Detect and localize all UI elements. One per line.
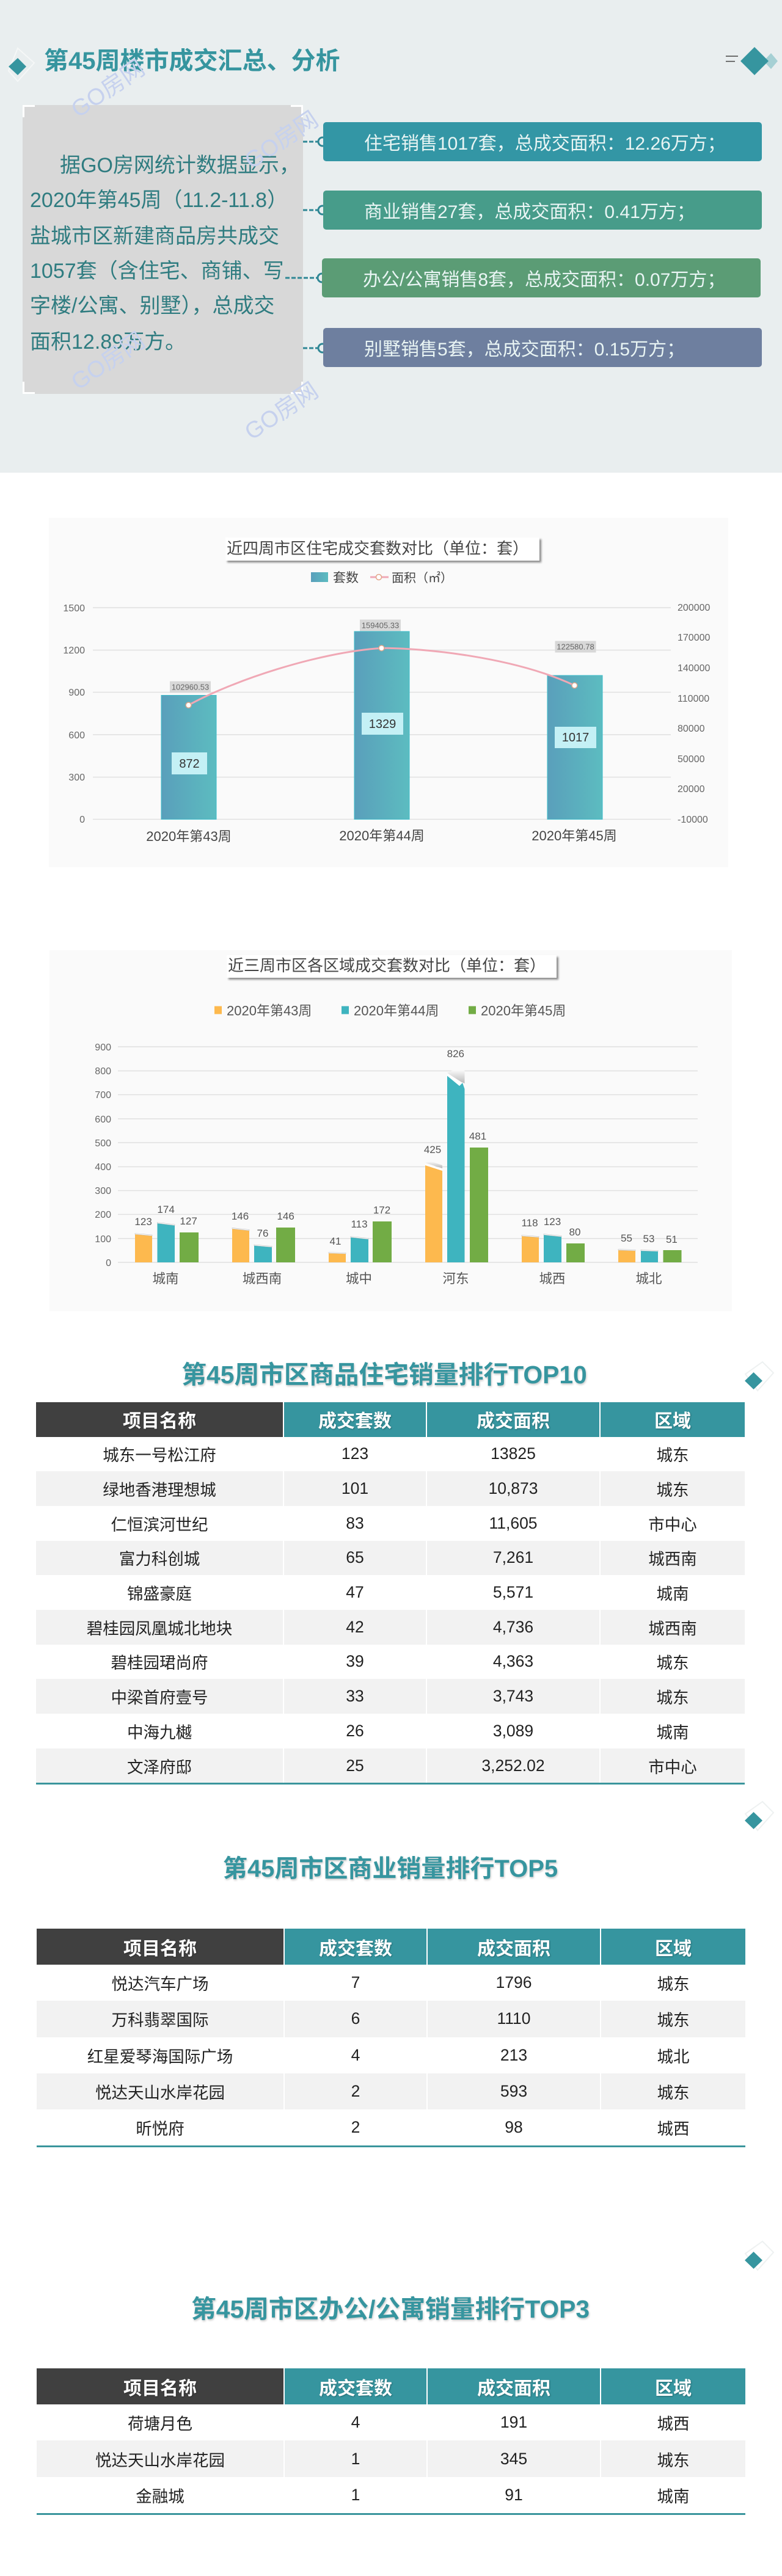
legend [214, 1003, 566, 1019]
axis labels: 400 [95, 1162, 111, 1173]
legend: 面积（㎡） [392, 570, 453, 585]
table header: 区域 [655, 2378, 692, 2399]
table: residential top 10: 25 [346, 1756, 364, 1775]
left axis labels: 600 [68, 730, 85, 741]
table: residential top 10: 城东 [656, 1481, 689, 1499]
callout: commercial sales [323, 191, 762, 230]
legend: 2020年第43周 [227, 1003, 312, 1019]
left axis labels: 1200 [63, 646, 85, 656]
table: residential top 10: 文泽府邸 [127, 1758, 192, 1777]
category labels: 河东 [442, 1272, 469, 1286]
axis labels: 800 [95, 1066, 111, 1077]
callout: residential sales [323, 122, 762, 161]
icon: commercial section diamond [744, 1801, 774, 1831]
text block: market summary paragraph: 1057套（含住宅、商铺、写 [30, 260, 284, 283]
green bars: week 45 [180, 1148, 682, 1262]
right axis labels: 110000 [678, 694, 709, 704]
value labels: 172 [373, 1204, 390, 1216]
right axis labels [678, 603, 710, 825]
table header: 项目名称 [123, 1938, 197, 1959]
callout: villa sales [323, 328, 762, 367]
value labels: 481 [469, 1130, 486, 1142]
value labels: 51 [666, 1234, 678, 1245]
left axis labels [63, 603, 85, 825]
category labels: 城西 [539, 1272, 566, 1286]
legend [311, 570, 453, 585]
chart title: three-week district comparison: 近三周市区各区域成交套数对比（单位：套） [228, 956, 546, 975]
category labels: 2020年第44周 [339, 828, 425, 843]
value labels [134, 1048, 678, 1247]
axis labels: 0 [106, 1258, 111, 1268]
table: residential top 10: 83 [346, 1514, 364, 1532]
table: residential top 10: 城东 [656, 1689, 689, 1707]
icon: left title diamond [8, 48, 35, 82]
axis labels [95, 1042, 111, 1268]
table: office top 3: 345 [500, 2450, 527, 2468]
table header: 项目名称 [123, 1411, 196, 1432]
table: residential top 10: 101 [342, 1479, 368, 1497]
table: office top 3: 1 [351, 2450, 360, 2468]
icon: residential section diamond [744, 1361, 774, 1391]
value labels: 425 [424, 1144, 441, 1155]
table: residential top 10: 4,363 [493, 1652, 533, 1670]
table: residential top 10: 城东一号松江府 [103, 1446, 216, 1464]
table: residential top 10: 65 [346, 1548, 364, 1566]
bar value labels: 872 [179, 757, 200, 771]
table: residential top 10: 绿地香港理想城 [103, 1481, 216, 1499]
category labels: 城北 [635, 1272, 662, 1286]
left axis labels: 900 [68, 688, 85, 698]
table: residential top 10: 碧桂园凤凰城北地块 [87, 1620, 232, 1638]
area value labels: 122580.78 [557, 642, 594, 651]
table: residential top 10: 锦盛豪庭 [127, 1585, 192, 1603]
category labels [146, 828, 617, 844]
table: residential top 10: 3,089 [493, 1722, 533, 1740]
page curl highlights [135, 1070, 658, 1254]
summary section background [0, 0, 782, 473]
value labels: 55 [621, 1232, 632, 1244]
right axis labels: 200000 [678, 603, 710, 613]
table header: 成交面积 [477, 1938, 550, 1959]
table: residential top 10: 市中心 [648, 1758, 697, 1777]
table: residential top 10: 中海九樾 [127, 1723, 192, 1742]
table: commercial top 5: 红星爱琴海国际广场 [87, 2048, 233, 2066]
table: residential top 10: 11,605 [489, 1514, 538, 1532]
table: residential top 10: 中梁首府壹号 [111, 1689, 208, 1707]
heading: office ranking: 第45周市区办公/公寓销量排行TOP3 [191, 2295, 590, 2323]
value labels: 53 [643, 1233, 654, 1245]
table: residential top 10: 39 [346, 1652, 364, 1670]
icon: office section diamond [744, 2241, 774, 2271]
table: commercial top 5: 城北 [657, 2048, 689, 2066]
value labels: 123 [134, 1216, 152, 1228]
table: residential top 10: 仁恒滨河世纪 [111, 1516, 208, 1534]
table: residential top 10: 城东 [656, 1654, 689, 1672]
table: residential top 10: 42 [346, 1618, 364, 1636]
panel: district chart background [49, 950, 732, 1311]
text block: market summary paragraph [30, 154, 300, 354]
watermark 3: GO房网 [67, 328, 150, 395]
table: commercial top 5: 593 [500, 2082, 527, 2100]
table: residential top 10: 123 [342, 1444, 368, 1463]
table: residential top 10: 3,743 [493, 1687, 533, 1705]
table: residential top 10: 7,261 [493, 1548, 533, 1566]
table: commercial top 5: 4 [351, 2046, 360, 2064]
table: residential top 10: 碧桂园珺尚府 [111, 1654, 208, 1672]
axis labels: 200 [95, 1210, 111, 1220]
table header: 区域 [654, 1411, 691, 1432]
callout: residential sales: 住宅销售1017套，总成交面积：12.26万方； [364, 134, 726, 154]
icon: right title diamonds [726, 47, 778, 75]
table: commercial top 5: 城西 [657, 2120, 689, 2138]
left axis labels: 1500 [63, 603, 85, 614]
table: office top 3: 191 [500, 2413, 527, 2431]
table: commercial top 5: 悦达天山水岸花园 [95, 2084, 225, 2102]
legend: 套数 [333, 571, 359, 585]
table header: 成交套数 [319, 2378, 392, 2399]
value labels: 127 [180, 1215, 197, 1227]
table: residential top 10: 城南 [656, 1585, 689, 1603]
axis labels: 900 [95, 1042, 111, 1053]
left axis labels: 300 [68, 773, 85, 783]
table: residential top 10: 47 [346, 1583, 364, 1601]
bars [161, 631, 602, 820]
table header: 区域 [655, 1938, 692, 1959]
value labels: 41 [330, 1235, 341, 1247]
table: office top 3: 91 [505, 2486, 523, 2504]
value labels: 113 [351, 1218, 368, 1230]
axis labels: 100 [95, 1234, 111, 1245]
axis labels: 300 [95, 1186, 111, 1196]
table: residential top 10: 10,873 [488, 1479, 538, 1497]
watermark 1: GO房网 [67, 56, 150, 123]
table: commercial top 5: 城东 [657, 2084, 689, 2102]
table: residential top 10: 市中心 [648, 1516, 697, 1534]
text block: market summary paragraph: 面积12.89万方。 [30, 330, 186, 354]
value labels: 174 [157, 1204, 175, 1215]
category labels: 城中 [346, 1272, 372, 1286]
table: commercial top 5: 昕悦府 [136, 2120, 185, 2138]
bar value labels: 1329 [369, 718, 396, 731]
table: residential top 10: 富力科创城 [119, 1550, 200, 1568]
table: residential top 10: 4,736 [493, 1618, 533, 1636]
right axis labels: -10000 [678, 815, 708, 825]
text block: market summary paragraph: 字楼/公寓、别墅），总成交 [30, 294, 274, 318]
legend: 2020年第44周 [354, 1003, 439, 1019]
area value labels: 159405.33 [362, 620, 399, 630]
text block: market summary paragraph: 据GO房网统计数据显示， [60, 154, 300, 177]
table header [36, 1402, 745, 1437]
axis labels: 700 [95, 1090, 111, 1101]
axis labels: 500 [95, 1138, 111, 1149]
area value labels: 102960.53 [172, 683, 209, 691]
table header: 成交套数 [318, 1411, 392, 1432]
right axis labels: 80000 [678, 724, 705, 734]
table header [37, 2368, 745, 2404]
table header: 成交面积 [477, 1411, 550, 1432]
table: commercial top 5: 213 [500, 2046, 527, 2064]
category labels: 2020年第43周 [146, 829, 232, 844]
text block: market summary paragraph: 盐城市区新建商品房共成交 [30, 225, 279, 248]
watermark 4: GO房网 [240, 378, 323, 445]
table: commercial top 5: 6 [351, 2009, 360, 2028]
table: commercial top 5: 2 [351, 2082, 360, 2100]
callout: office and apartment sales [322, 258, 761, 297]
watermark 2: GO房网 [240, 107, 323, 174]
right axis labels: 50000 [678, 754, 705, 765]
table: office top 3 [37, 2368, 745, 2515]
right axis labels: 20000 [678, 784, 705, 795]
table: commercial top 5: 2 [351, 2118, 360, 2136]
bar value labels: 1017 [562, 731, 589, 744]
table: residential top 10: 3,252.02 [481, 1756, 545, 1775]
value labels: 146 [277, 1210, 294, 1222]
table: residential top 10: 26 [346, 1722, 364, 1740]
table: commercial top 5: 城东 [657, 1975, 689, 1993]
callout: office and apartment sales: 办公/公寓销售8套，总成交面积：0.07万方； [363, 270, 725, 290]
table header [37, 1929, 745, 1965]
table: commercial top 5: 7 [351, 1973, 360, 1992]
value labels: 76 [257, 1228, 268, 1239]
connectors from text box to sales bars [285, 137, 323, 353]
heading: residential ranking: 第45周市区商品住宅销量排行TOP10 [181, 1361, 587, 1389]
table: residential top 10: 城西南 [648, 1550, 697, 1568]
panel: summary text box [23, 105, 303, 394]
table header: 成交面积 [477, 2378, 550, 2399]
category labels: 城南 [152, 1272, 179, 1286]
table: commercial top 5: 1796 [496, 1973, 532, 1992]
table: office top 3: 城西 [657, 2415, 689, 2433]
value labels: 826 [447, 1048, 464, 1060]
right axis labels: 170000 [678, 633, 710, 643]
table: commercial top 5: 城东 [657, 2011, 689, 2029]
value labels: 146 [232, 1210, 249, 1222]
legend: 2020年第45周 [481, 1003, 566, 1019]
table: residential top 10: 城东 [656, 1446, 689, 1464]
table: commercial top 5: 悦达汽车广场 [111, 1975, 209, 1993]
text block: market summary paragraph: 2020年第45周（11.2-11.8） [30, 189, 288, 212]
left axis labels: 0 [79, 815, 85, 825]
table: residential top 10: 城西南 [648, 1620, 697, 1638]
table header: 项目名称 [123, 2378, 197, 2399]
table: office top 3: 1 [351, 2486, 360, 2504]
table: residential top 10: 城南 [656, 1723, 689, 1742]
heading: commercial ranking: 第45周市区商业销量排行TOP5 [223, 1855, 558, 1882]
table: office top 3: 4 [351, 2413, 360, 2431]
table: residential top 10: 13825 [491, 1444, 536, 1463]
category labels: 城西南 [243, 1272, 282, 1286]
table: commercial top 5 [37, 1929, 745, 2147]
table: residential top 10: 33 [346, 1687, 364, 1705]
chart: district unit sales [95, 1003, 698, 1286]
table: office top 3: 金融城 [136, 2487, 185, 2506]
table header: 成交套数 [319, 1938, 392, 1959]
bar value labels [172, 713, 596, 774]
area line [186, 646, 577, 708]
callout: commercial sales: 商业销售27套，总成交面积：0.41万方； [364, 202, 695, 222]
chart title: four-week residential comparison: 近四周市区住宅成交套数对比（单位：套） [227, 539, 528, 558]
table: commercial top 5: 98 [505, 2118, 523, 2136]
heading: weekly summary: 第45周楼市成交汇总、分析 [44, 48, 340, 75]
category labels: 2020年第45周 [532, 828, 617, 843]
value labels: 80 [569, 1226, 580, 1238]
table: office top 3: 城南 [657, 2487, 689, 2506]
right axis labels: 140000 [678, 663, 710, 674]
value labels: 118 [521, 1217, 538, 1229]
table: office top 3: 城东 [657, 2451, 689, 2470]
orange bars: week 43 [135, 1165, 635, 1262]
teal bars: week 44 [158, 1076, 658, 1262]
table: office top 3: 悦达天山水岸花园 [95, 2451, 225, 2470]
table: residential top 10: 5,571 [493, 1583, 533, 1601]
panel: residential chart background [49, 518, 728, 867]
axis labels: 600 [95, 1115, 111, 1125]
chart: residential units and area [63, 570, 710, 844]
value labels: 123 [544, 1216, 561, 1228]
table: commercial top 5: 1110 [497, 2009, 531, 2028]
table: office top 3: 荷塘月色 [128, 2415, 192, 2433]
category labels [152, 1272, 662, 1286]
callout: villa sales: 别墅销售5套，总成交面积：0.15万方； [364, 340, 685, 360]
area value labels [170, 619, 596, 693]
table: commercial top 5: 万科翡翠国际 [111, 2011, 209, 2029]
table: residential top 10 [36, 1402, 745, 1785]
